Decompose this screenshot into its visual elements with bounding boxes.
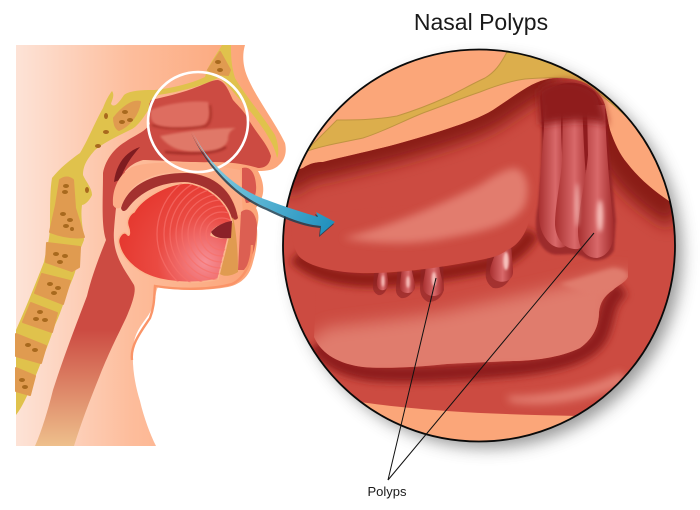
magnified nasal cavity [280, 40, 680, 450]
lower turbinate shadow [316, 288, 622, 374]
upper turbinate shadow [296, 232, 532, 279]
bottom highlight [507, 372, 630, 404]
lower turbinate [314, 264, 628, 368]
magnified view shadow [292, 58, 682, 448]
polyps leader lines [388, 233, 594, 480]
vertebrae [16, 52, 230, 395]
dark mucosa shading [280, 78, 680, 208]
nasal cavity and pharynx [103, 80, 271, 205]
upper turbinate [296, 226, 528, 274]
polyp shadow [536, 120, 616, 260]
pointer arrow [191, 131, 335, 237]
dark polyp base [540, 83, 610, 170]
soft palate fold [114, 147, 140, 182]
polyp shadows [373, 246, 512, 302]
tongue muscle lines [156, 183, 232, 282]
head cross-section [16, 45, 287, 446]
polyps label: Polyps [367, 484, 407, 499]
nasal mucosa [284, 78, 674, 416]
nasal bone band [308, 52, 626, 152]
throat passage [35, 172, 135, 446]
jaw bone [218, 217, 238, 276]
nasal turbinates [150, 101, 236, 153]
dark polyp roots [538, 81, 608, 125]
spine bone [16, 45, 278, 415]
polyp highlights [575, 183, 603, 232]
title: Nasal Polyps [414, 9, 548, 35]
large polyps [536, 81, 616, 260]
polyp highlights [382, 252, 509, 288]
face and neck silhouette [16, 45, 286, 446]
magnifier circle [148, 72, 248, 172]
upper turbinate highlight [343, 168, 528, 243]
palate [113, 163, 243, 215]
tongue [118, 182, 233, 282]
small polyps [373, 245, 513, 302]
lips [238, 168, 257, 270]
bone pores [19, 60, 223, 389]
magnifier outline [283, 50, 675, 442]
lower peach tissue [363, 402, 574, 441]
chin outline [132, 245, 252, 360]
dark roof above tongue [121, 173, 238, 220]
peach tissue background [299, 50, 669, 201]
